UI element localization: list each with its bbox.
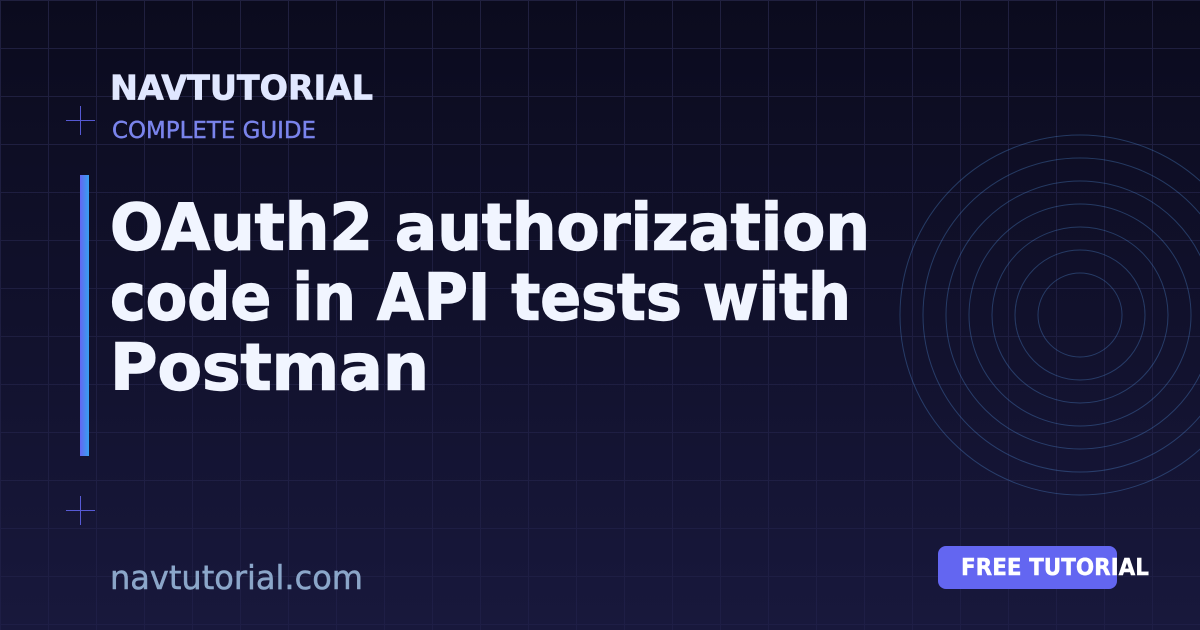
- accent bar: [80, 175, 89, 456]
- title: code in API tests with: [110, 261, 851, 335]
- brand name: NAVTUTORIAL: [110, 69, 373, 109]
- icon: bottom crosshair: [66, 496, 95, 525]
- badge: [938, 546, 1149, 589]
- concentric circles: [900, 135, 1200, 495]
- icon: top crosshair: [66, 106, 95, 135]
- website url: navtutorial.com: [110, 558, 363, 597]
- title: [110, 191, 870, 405]
- title: OAuth2 authorization: [110, 191, 870, 265]
- subtitle: COMPLETE GUIDE: [112, 118, 316, 144]
- title: Postman: [110, 331, 429, 405]
- badge: FREE TUTORIAL: [961, 555, 1149, 581]
